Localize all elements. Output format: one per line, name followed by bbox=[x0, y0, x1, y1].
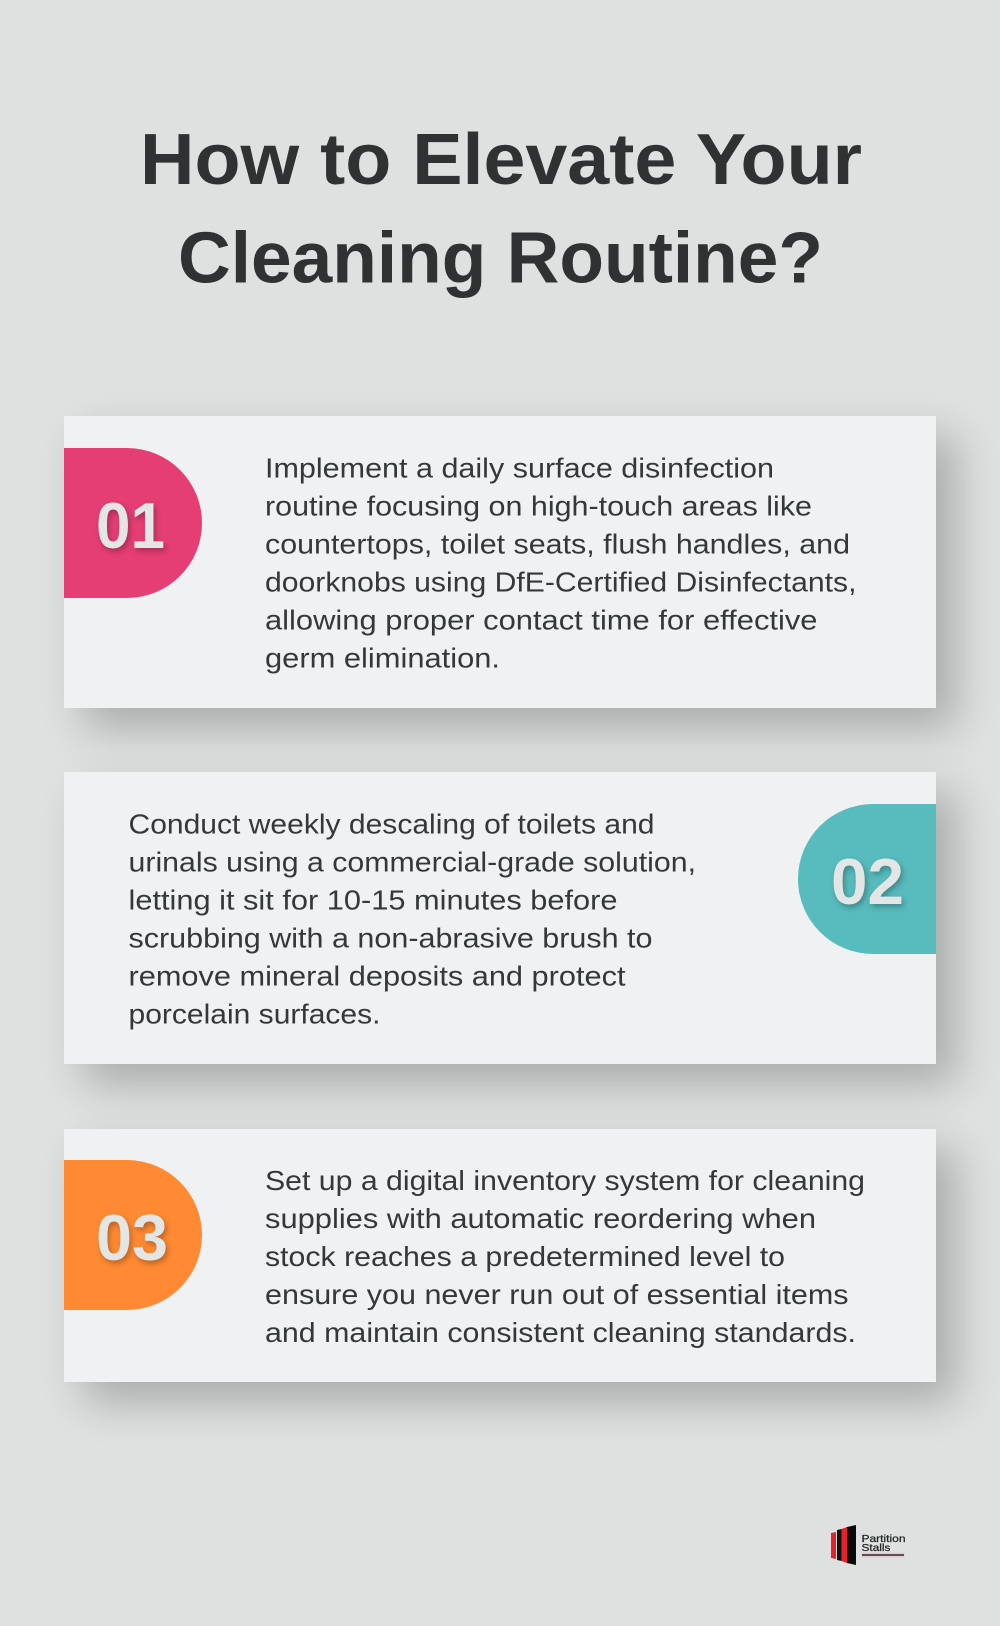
badge: 02: 02 bbox=[831, 845, 904, 918]
badge: 03: 03 bbox=[96, 1201, 168, 1274]
text: step 02 description: remove mineral deposits and protect bbox=[128, 961, 626, 992]
text: step 01 description: germ elimination. bbox=[265, 643, 500, 674]
text: step 03 description: and maintain consistent cleaning standards. bbox=[265, 1317, 856, 1348]
badge: 02 bbox=[798, 804, 936, 954]
logo: Partition Stalls bbox=[831, 1525, 906, 1565]
text: step 02 description: urinals using a commercial-grade solution, bbox=[128, 847, 696, 878]
text: step 03 description: ensure you never run out of essential items bbox=[265, 1279, 848, 1310]
logo wordmark: Stalls bbox=[862, 1542, 890, 1554]
panel: step 03 bbox=[64, 1129, 936, 1382]
text: step 03 description: stock reaches a predetermined level to bbox=[265, 1241, 785, 1272]
text: step 03 description bbox=[265, 1165, 865, 1348]
title: Cleaning Routine? bbox=[178, 218, 823, 298]
panel: step 01 bbox=[64, 416, 936, 708]
icon: door bars bbox=[831, 1525, 856, 1565]
badge: 03 bbox=[64, 1160, 202, 1310]
text: step 02 description: letting it sit for 10-15 minutes before bbox=[128, 885, 618, 916]
text: step 03 description: supplies with automatic reordering when bbox=[265, 1203, 816, 1234]
title: How to Elevate Your bbox=[140, 120, 862, 200]
logo wordmark bbox=[862, 1533, 906, 1558]
text: step 01 description: routine focusing on high-touch areas like bbox=[265, 491, 812, 522]
logo wordmark: Partition bbox=[862, 1533, 906, 1545]
text: step 02 description: scrubbing with a non-abrasive brush to bbox=[128, 923, 652, 954]
text: step 01 description: doorknobs using DfE-Certified Disinfectants, bbox=[265, 567, 856, 598]
text: step 02 description: porcelain surfaces. bbox=[128, 999, 380, 1030]
badge: 01: 01 bbox=[96, 489, 165, 562]
text: step 01 description bbox=[265, 453, 856, 674]
badge: 01 bbox=[64, 448, 202, 598]
text: step 02 description bbox=[128, 809, 696, 1030]
text: step 01 description: Implement a daily surface disinfection bbox=[265, 453, 774, 484]
text: step 01 description: countertops, toilet seats, flush handles, and bbox=[265, 529, 850, 560]
text: step 01 description: allowing proper contact time for effective bbox=[265, 605, 818, 636]
title bbox=[140, 120, 862, 298]
panel: step 02 bbox=[64, 772, 936, 1064]
text: step 02 description: Conduct weekly descaling of toilets and bbox=[128, 809, 654, 840]
text: step 03 description: Set up a digital inventory system for cleaning bbox=[265, 1165, 865, 1196]
